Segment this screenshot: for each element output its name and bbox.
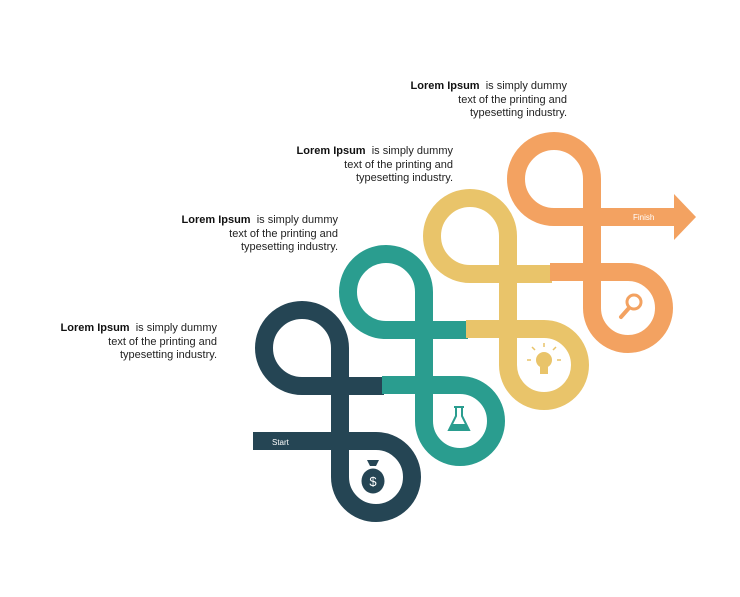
text block: stage 2: typesetting industry. (241, 241, 338, 253)
text block: stage 4: text of the printing and (458, 94, 567, 106)
text block: stage 1: text of the printing and (108, 336, 217, 348)
text block: stage 3: text of the printing and (344, 158, 453, 170)
icon: flask (449, 407, 469, 430)
text block: stage 4: typesetting industry. (470, 107, 567, 119)
icon: magnifier (621, 295, 641, 317)
text block: stage 2: text of the printing and (229, 228, 338, 240)
icon: light bulb (527, 343, 561, 374)
text block: stage 3: typesetting industry. (356, 172, 453, 184)
text block: stage 2 (182, 214, 338, 253)
loop: orange with finish arrow (stage 4) (516, 141, 696, 344)
loop: teal (stage 2) (348, 254, 496, 457)
text block: stage 1: Lorem Ipsum is simply dummy (61, 322, 217, 334)
icon: money bag: $ (369, 474, 377, 489)
label: Finish: Finish (633, 213, 654, 222)
text block: stage 4 (411, 80, 567, 119)
text block: stage 2: Lorem Ipsum is simply dummy (182, 214, 338, 226)
text block: stage 1: typesetting industry. (120, 349, 217, 361)
text block: stage 3: Lorem Ipsum is simply dummy (297, 145, 453, 157)
text block: stage 3 (297, 145, 453, 184)
icon: money bag (362, 460, 384, 494)
label: Start: Start (272, 438, 290, 447)
text block: stage 4: Lorem Ipsum is simply dummy (411, 80, 567, 92)
text block: stage 1 (61, 322, 217, 361)
loop: yellow (stage 3) (432, 198, 580, 401)
loop: dark navy (stage 1) (253, 310, 412, 513)
